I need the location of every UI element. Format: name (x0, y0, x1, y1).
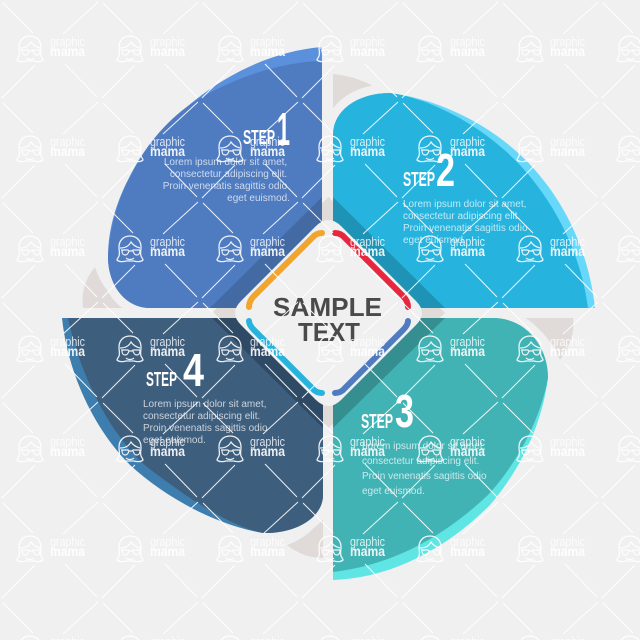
step 1 heading: STEP (243, 127, 275, 149)
grey wedges behind the panels (82, 74, 573, 558)
panel halos separating wedges from panels (62, 47, 595, 580)
panel shadow (333, 318, 445, 428)
panel: step 4 (62, 318, 323, 533)
step 4 text: consectetur adipiscing elit. (143, 411, 260, 422)
step 4 text: Lorem ipsum dolor sit amet, (143, 399, 266, 410)
step 1 heading: 1 (277, 103, 290, 155)
step 4 heading: STEP (146, 369, 177, 391)
step 4 text: Proin venenatis sagittis odio (143, 423, 268, 434)
centre diamond (235, 220, 422, 406)
step 4 heading (146, 344, 204, 396)
step 1 text: consectetur adipiscing elit. (170, 169, 287, 180)
step 3 text: Proin venenatis sagittis odio (362, 471, 487, 482)
red edge (335, 233, 408, 307)
step 1 heading (243, 103, 290, 155)
step 3 text: consectetur adipiscing elit. (362, 456, 479, 467)
step 2 text: eget euismod. (403, 235, 466, 246)
grey cross core visible in the panel gaps (212, 197, 445, 428)
panel shadow (333, 197, 445, 308)
step 3 text: eget euismod. (362, 486, 425, 497)
panel: step 2 (333, 93, 595, 308)
step 3 heading (361, 385, 414, 437)
centre title: SAMPLE (273, 292, 382, 322)
step 1 text: Lorem ipsum dolor sit amet, (164, 157, 287, 168)
centre title: TEXT (298, 317, 360, 347)
panel: step 3 (333, 318, 548, 580)
step 1 text: eget euismod. (227, 193, 290, 204)
blue edge (335, 321, 408, 393)
step 2 text: consectetur adipiscing elit. (403, 211, 520, 222)
step 4 heading: 4 (183, 344, 204, 396)
step 2 heading (403, 144, 455, 196)
step 3 text: Lorem ipsum dolor sit amet, (362, 441, 485, 452)
panel shadow (210, 197, 322, 308)
panel shadow (212, 318, 323, 428)
step 2 heading: 2 (436, 144, 455, 196)
step 2 heading: STEP (403, 169, 435, 191)
panel: step 1 (108, 47, 322, 308)
step 1 text: Proin venenatis sagittis odio (163, 181, 288, 192)
step 2 text: Proin venenatis sagittis odio (403, 223, 528, 234)
step 3 heading: STEP (361, 411, 393, 433)
orange edge (249, 233, 322, 307)
step 3 heading: 3 (395, 385, 414, 437)
cyan edge (249, 321, 322, 393)
step 2 text: Lorem ipsum dolor sit amet, (403, 199, 526, 210)
step 4 text: eget euismod. (143, 435, 206, 446)
